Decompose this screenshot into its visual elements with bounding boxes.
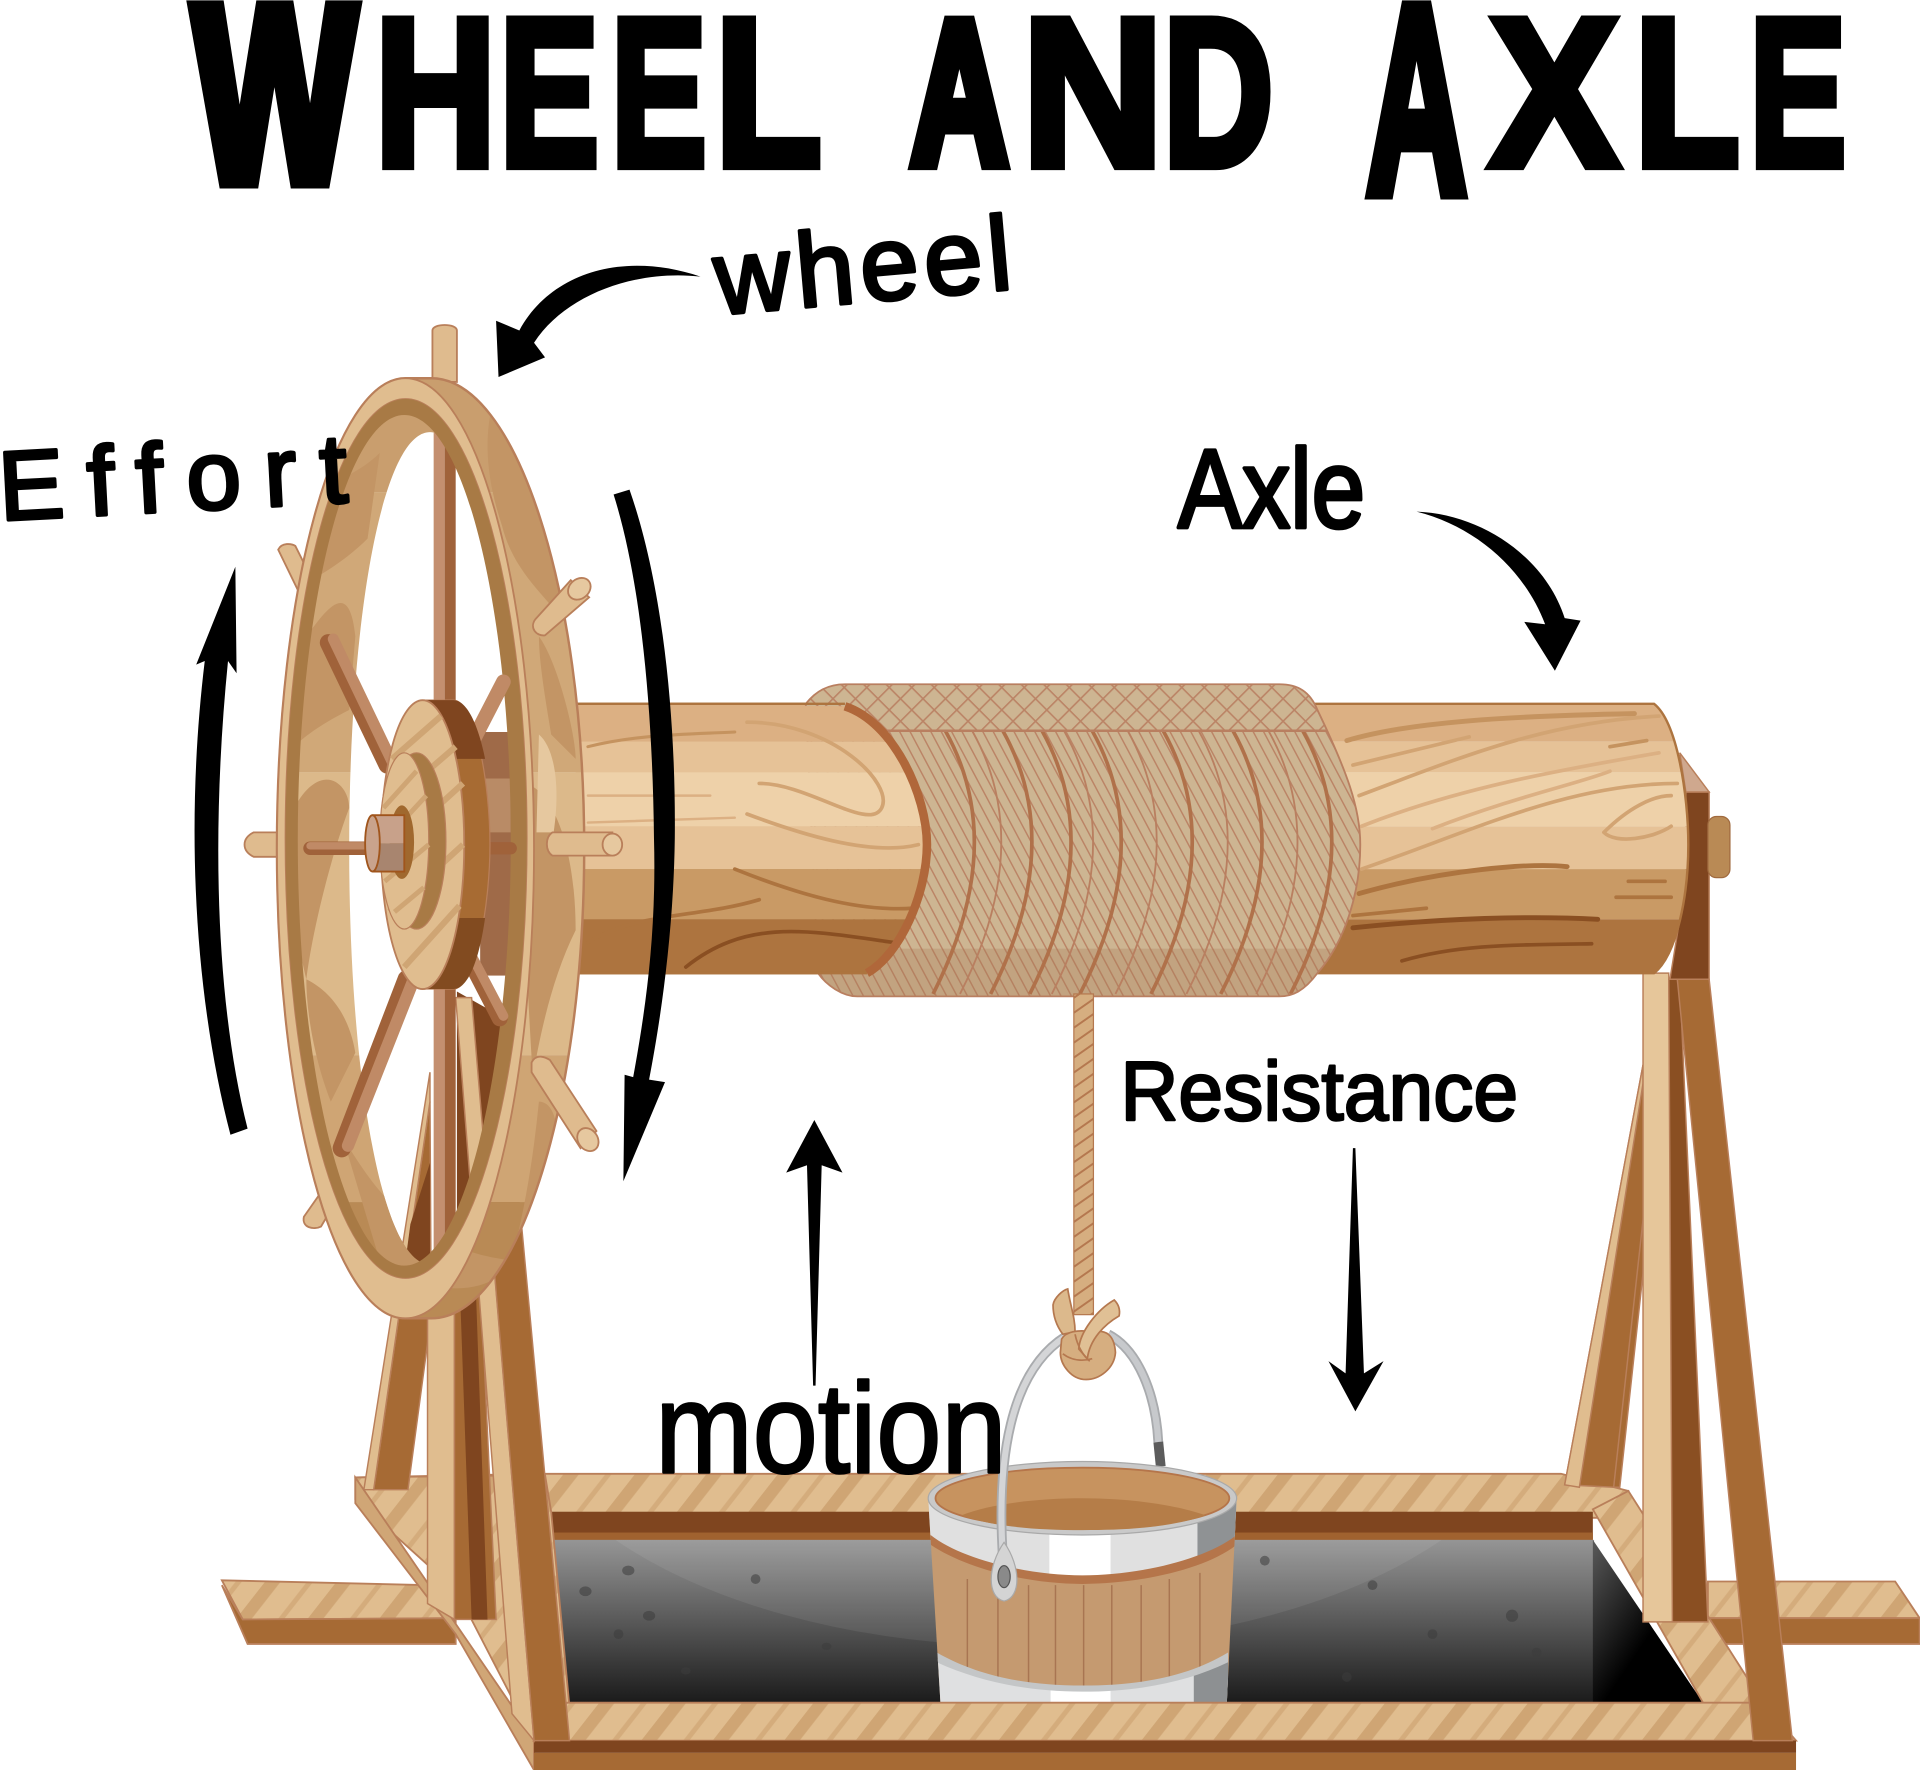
axle log, left section xyxy=(576,704,943,973)
bucket handle, far side xyxy=(1108,1334,1161,1466)
right cross beam xyxy=(1708,1581,1920,1644)
inner spokes xyxy=(310,639,511,1148)
hanging rope xyxy=(1074,994,1093,1315)
rope knot xyxy=(1053,1289,1120,1380)
handle eye xyxy=(991,1542,1017,1601)
wheel rim xyxy=(270,367,594,1324)
hub xyxy=(365,700,490,989)
arrow: axle xyxy=(1417,512,1581,671)
bucket handle, near side xyxy=(1001,1337,1065,1573)
bucket xyxy=(925,1462,1243,1709)
wheel handle stubs behind the rim xyxy=(245,325,457,1228)
label: wheel: wheel xyxy=(708,195,1016,338)
title xyxy=(194,0,1846,249)
label: effort: Effort xyxy=(0,413,350,541)
arrow: resistance down xyxy=(1328,1148,1384,1411)
arrow: motion up xyxy=(786,1120,842,1386)
wheel handle pegs in front xyxy=(532,573,622,1155)
rope coil on axle xyxy=(796,679,1371,1000)
arrow: effort up xyxy=(195,567,248,1135)
wheel back spoke xyxy=(434,392,456,1298)
well platform rear plank xyxy=(355,1474,1628,1540)
right frame legs xyxy=(1565,753,1792,1741)
axle bolt, right end xyxy=(1708,816,1730,878)
axle log xyxy=(576,704,1702,973)
well pit xyxy=(554,1540,1702,1702)
left frame legs xyxy=(364,991,570,1741)
arrow: wheel xyxy=(496,266,700,377)
label: resistance: Resistance xyxy=(1120,1045,1518,1138)
platform front plank xyxy=(534,1703,1796,1770)
arrow: wheel rotation down xyxy=(614,490,675,1181)
left and right platform side planks xyxy=(355,1475,1763,1770)
label: motion: motion xyxy=(655,1358,1007,1501)
label: axle: Axle xyxy=(1178,426,1365,552)
hub collar xyxy=(480,732,512,976)
left cross beam xyxy=(222,1580,456,1644)
